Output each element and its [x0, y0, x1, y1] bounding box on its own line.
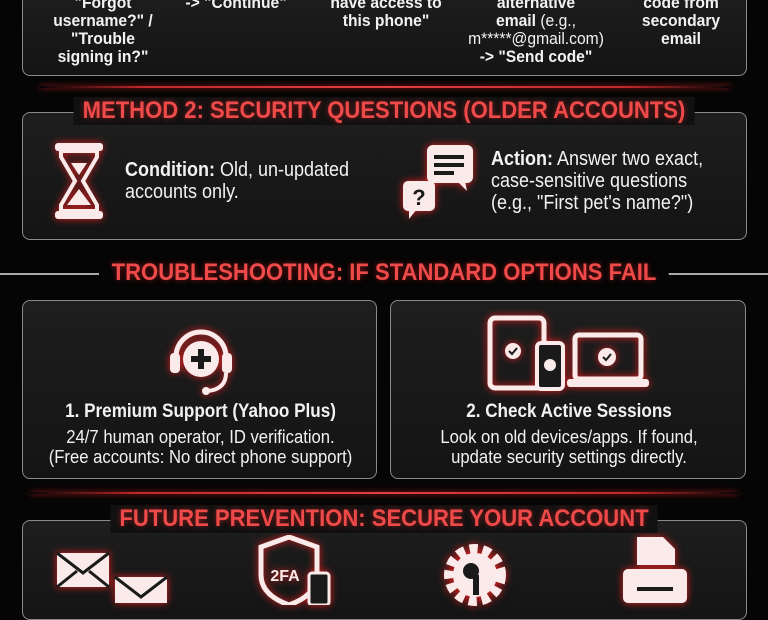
text: action: (e.g., "First pet's name?"): [491, 192, 693, 214]
text: action: Action: Answer two exact,: [491, 148, 703, 170]
heading: future prevention: FUTURE PREVENTION: SECURE YOUR ACCOUNT: [119, 505, 649, 532]
icon: envelopes: [50, 546, 174, 610]
step 5 text: secondary: [642, 11, 720, 30]
step 4 text: [468, 0, 604, 66]
text: condition: [125, 159, 349, 203]
icon: printer: [616, 530, 694, 610]
icon: chat bubbles: ?: [412, 185, 426, 210]
icon: 2FA shield: 2FA: [270, 568, 300, 585]
panel: premium support: [22, 300, 377, 479]
text: condition: Condition: Old, un-updated: [125, 159, 349, 181]
icon: chat bubbles: [396, 138, 480, 222]
step 3 text: this phone": [343, 11, 429, 30]
icon: headset: [164, 324, 238, 400]
panel: active sessions: [390, 300, 746, 479]
text: active sessions: 2. Check Active Sessions: [466, 401, 672, 422]
step 5 text: email: [661, 29, 701, 48]
icon: 2FA shield: [252, 533, 337, 612]
panel: future prevention: [22, 520, 747, 620]
step 4 text: email (e.g.,: [496, 11, 576, 30]
step 3 text: [330, 0, 442, 30]
step 4 text: -> "Send code": [480, 47, 592, 66]
step 5 text: [642, 0, 720, 48]
step 1 text: [53, 0, 153, 66]
icon: devices: [481, 309, 654, 398]
panel: active sessions: Look on old devices/apps. If found,: [440, 426, 698, 447]
step 1 text: signing in?": [58, 47, 148, 66]
step 1 text: "Trouble: [71, 29, 135, 48]
heading: method 2: METHOD 2: SECURITY QUESTIONS (OLDER ACCOUNTS): [83, 97, 685, 124]
panel: method 2 security questions: [22, 112, 747, 240]
step 4 text: m*****@gmail.com): [468, 29, 604, 48]
panel: premium support: (Free accounts: No direct phone support): [49, 446, 352, 467]
text: premium support: 1. Premium Support (Yahoo Plus): [65, 401, 336, 422]
panel: method 1 steps (top): [22, 0, 747, 76]
text: action: case-sensitive questions: [491, 170, 687, 192]
step 1 text: username?" /: [53, 11, 153, 30]
icon: gear key: [438, 538, 512, 612]
panel: premium support: 24/7 human operator, ID verification.: [66, 426, 335, 447]
text: action: [491, 148, 703, 214]
heading: troubleshooting: TROUBLESHOOTING: IF STANDARD OPTIONS FAIL: [112, 259, 656, 286]
text: condition: accounts only.: [125, 181, 239, 203]
panel: active sessions: update security settings directly.: [451, 446, 687, 467]
icon: hourglass: [50, 136, 108, 226]
